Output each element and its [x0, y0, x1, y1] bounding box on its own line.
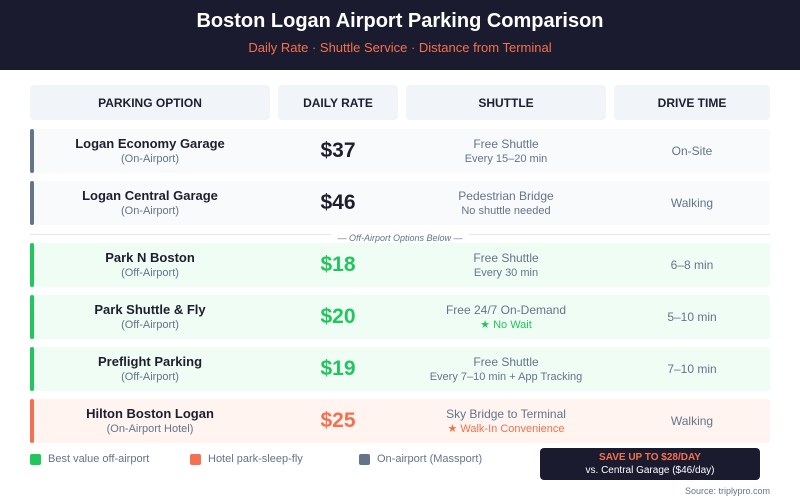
legend: on-airport: On-airport (Massport) — [377, 453, 482, 465]
row: Logan Economy Garage: (On-Airport) — [121, 153, 179, 165]
source: Source: triplypro.com — [685, 486, 770, 496]
row: Logan Central Garage — [30, 181, 770, 225]
row: Preflight Parking — [30, 347, 770, 391]
row: Logan Economy Garage — [30, 129, 770, 173]
column header: parking option — [30, 85, 270, 120]
row: Preflight Parking: 7–10 min — [667, 362, 717, 376]
column header: parking option: PARKING OPTION — [98, 96, 202, 110]
row: Hilton Boston Logan: Sky Bridge to Terminal — [446, 406, 566, 420]
column header: shuttle — [406, 85, 606, 120]
column header: daily rate — [278, 85, 398, 120]
subtitle: Daily Rate · Shuttle Service · Distance from Terminal — [248, 40, 552, 55]
callout: savings — [540, 448, 760, 480]
row: Park N Boston: $18 — [320, 253, 356, 276]
column header: shuttle: SHUTTLE — [478, 96, 534, 110]
row: Logan Economy Garage: $37 — [320, 139, 356, 162]
row: Hilton Boston Logan: ★ Walk-In Convenience — [447, 422, 565, 434]
row: Logan Economy Garage: On-Site — [672, 144, 712, 158]
row: Logan Economy Garage: Every 15–20 min — [465, 152, 547, 164]
row: Park Shuttle & Fly: Park Shuttle & Fly — [94, 302, 206, 317]
row: Park N Boston: (Off-Airport) — [121, 267, 179, 279]
row: Park Shuttle & Fly: 5–10 min — [667, 310, 717, 324]
row: Hilton Boston Logan: Walking — [671, 414, 713, 428]
row: Logan Central Garage: $46 — [320, 191, 356, 214]
row: Logan Central Garage: Pedestrian Bridge — [458, 188, 554, 202]
row: Park Shuttle & Fly: ★ No Wait — [480, 318, 532, 330]
column header: daily rate: DAILY RATE — [303, 96, 373, 110]
column header: drive time: DRIVE TIME — [658, 96, 726, 110]
title: Boston Logan Airport Parking Comparison — [196, 10, 604, 32]
row: Park Shuttle & Fly: $20 — [320, 305, 356, 328]
header banner — [0, 0, 800, 70]
text: — Off-Airport Options Below — — [337, 233, 463, 243]
row: Preflight Parking: Every 7–10 min + App Tracking — [430, 370, 582, 382]
row: Park Shuttle & Fly — [30, 295, 770, 339]
row: Logan Central Garage: (On-Airport) — [121, 205, 179, 217]
row: Hilton Boston Logan: Hilton Boston Logan — [86, 406, 214, 421]
row: Hilton Boston Logan: $25 — [320, 409, 356, 432]
column header: drive time — [614, 85, 770, 120]
row: Logan Central Garage: No shuttle needed — [461, 204, 551, 216]
callout: savings: vs. Central Garage ($46/day) — [586, 465, 714, 476]
row: Logan Central Garage: Walking — [671, 196, 713, 210]
legend: hotel: Hotel park-sleep-fly — [208, 453, 303, 465]
divider: off-airport options — [30, 234, 770, 235]
row: Park Shuttle & Fly: (Off-Airport) — [121, 319, 179, 331]
row: Logan Economy Garage: Logan Economy Garage — [75, 136, 225, 151]
row: Park N Boston — [30, 243, 770, 287]
row: Preflight Parking: (Off-Airport) — [121, 371, 179, 383]
row: Hilton Boston Logan — [30, 399, 770, 443]
legend: best value: Best value off-airport — [48, 453, 149, 465]
row: Preflight Parking: Free Shuttle — [473, 354, 539, 368]
row: Logan Central Garage: Logan Central Garage — [82, 188, 218, 203]
row: Park N Boston: 6–8 min — [671, 258, 713, 272]
row: Park N Boston: Park N Boston — [105, 250, 195, 265]
callout: savings: SAVE UP TO $28/DAY — [599, 452, 701, 463]
row: Preflight Parking: $19 — [320, 357, 356, 380]
row: Hilton Boston Logan: (On-Airport Hotel) — [107, 423, 193, 435]
row: Preflight Parking: Preflight Parking — [98, 354, 202, 369]
row: Park N Boston: Free Shuttle — [473, 250, 539, 264]
row: Park N Boston: Every 30 min — [474, 266, 538, 278]
row: Park Shuttle & Fly: Free 24/7 On-Demand — [446, 302, 566, 316]
row: Logan Economy Garage: Free Shuttle — [473, 136, 539, 150]
